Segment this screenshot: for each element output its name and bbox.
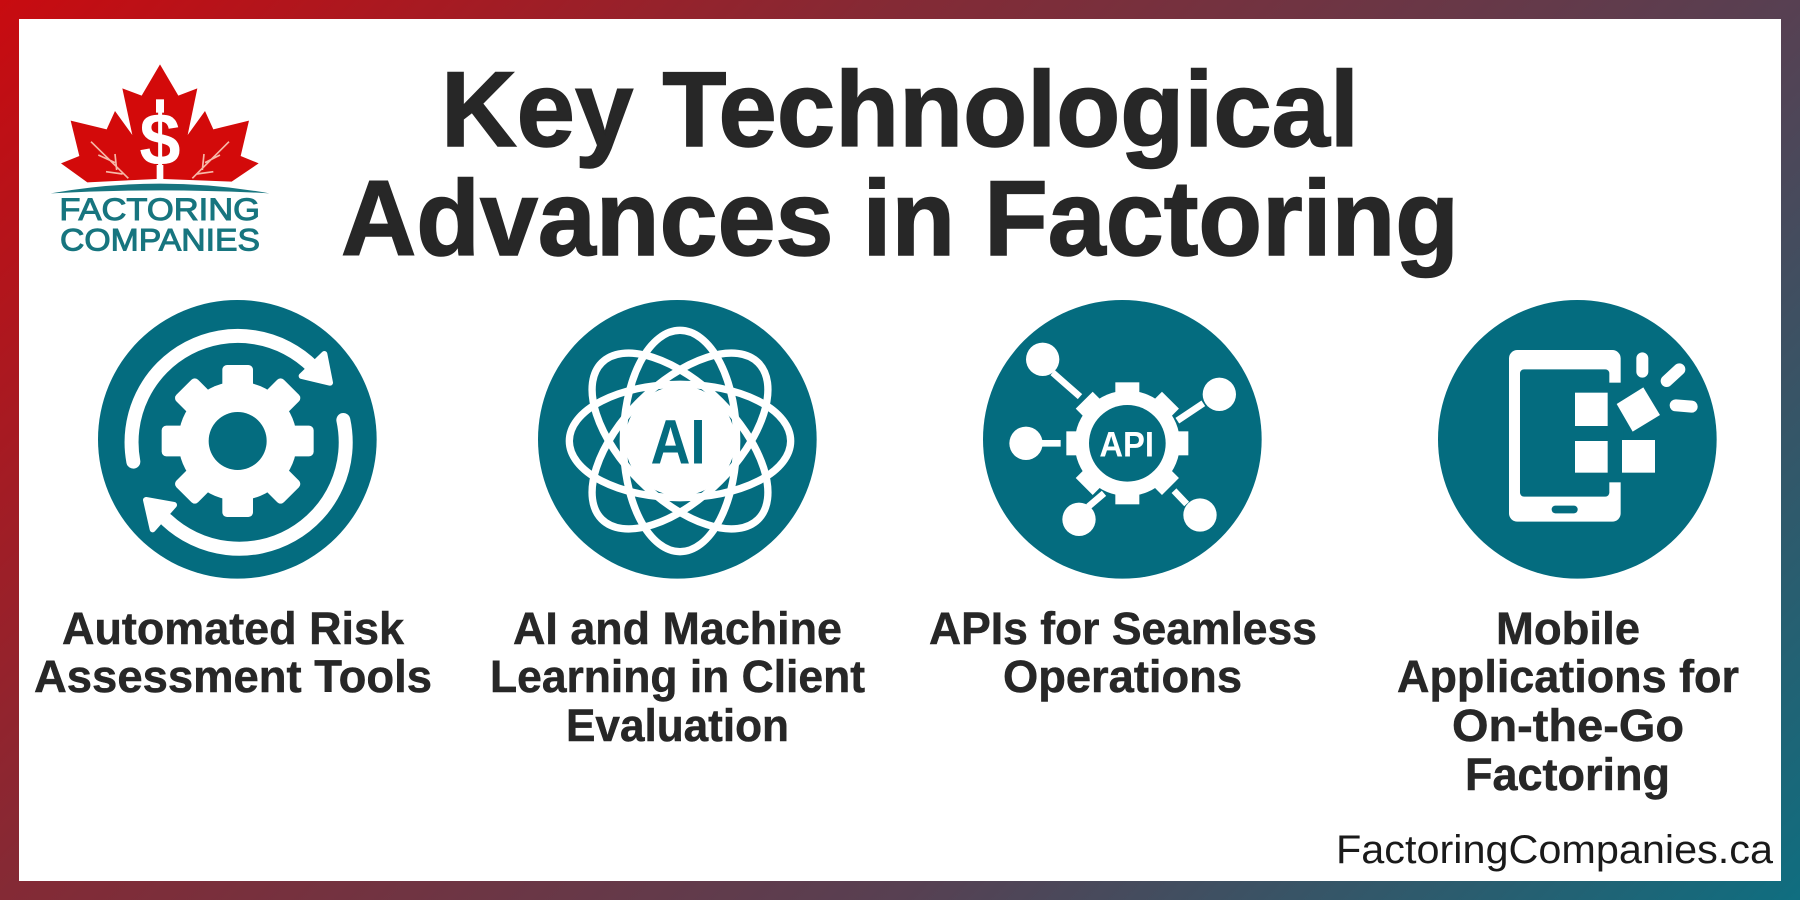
title: Key Technological (441, 49, 1359, 169)
label: APIs for Seamless Operations: APIs for Seamless (929, 603, 1317, 654)
icon: mobile phone with app tiles (1438, 300, 1717, 579)
icon: API gear network: API (1099, 426, 1154, 465)
label: Mobile Applications for On-the-Go Factoring: Factoring (1465, 749, 1670, 800)
label: Automated Risk Assessment Tools: Automated Risk (62, 603, 405, 654)
label: Automated Risk Assessment Tools (34, 603, 432, 702)
label: Mobile Applications for On-the-Go Factoring: On-the-Go (1452, 700, 1684, 751)
title (341, 49, 1459, 278)
label: AI and Machine Learning in Client Evaluation: Learning in Client (490, 651, 865, 702)
dollar sign: $ (139, 98, 181, 181)
label: Mobile Applications for On-the-Go Factoring: Applications for (1397, 651, 1739, 702)
label: AI and Machine Learning in Client Evaluation: Evaluation (566, 700, 789, 751)
icon: AI atom: AI (651, 407, 706, 477)
icon: gear with circular arrows (98, 300, 377, 579)
leaf veins (91, 142, 229, 178)
label: APIs for Seamless Operations (929, 603, 1317, 702)
footer website: FactoringCompanies.ca (1336, 828, 1774, 872)
label: AI and Machine Learning in Client Evaluation: AI and Machine (513, 603, 842, 654)
label: Mobile Applications for On-the-Go Factoring: Mobile (1496, 603, 1640, 654)
title: Advances in Factoring (341, 158, 1459, 278)
logo wordmark: COMPANIES (60, 223, 260, 258)
icon: AI atom (538, 300, 817, 579)
logo: Factoring Companies maple leaf (51, 64, 269, 258)
logo wordmark: FACTORING (59, 192, 260, 227)
label: AI and Machine Learning in Client Evaluation (490, 603, 865, 751)
teal arc (51, 184, 269, 193)
label: Automated Risk Assessment Tools: Assessment Tools (34, 651, 432, 702)
icon: API gear network (983, 300, 1262, 579)
label: Mobile Applications for On-the-Go Factoring (1397, 603, 1739, 800)
label: APIs for Seamless Operations: Operations (1003, 651, 1242, 702)
logo wordmark (59, 192, 260, 258)
icon: maple leaf (61, 64, 259, 182)
